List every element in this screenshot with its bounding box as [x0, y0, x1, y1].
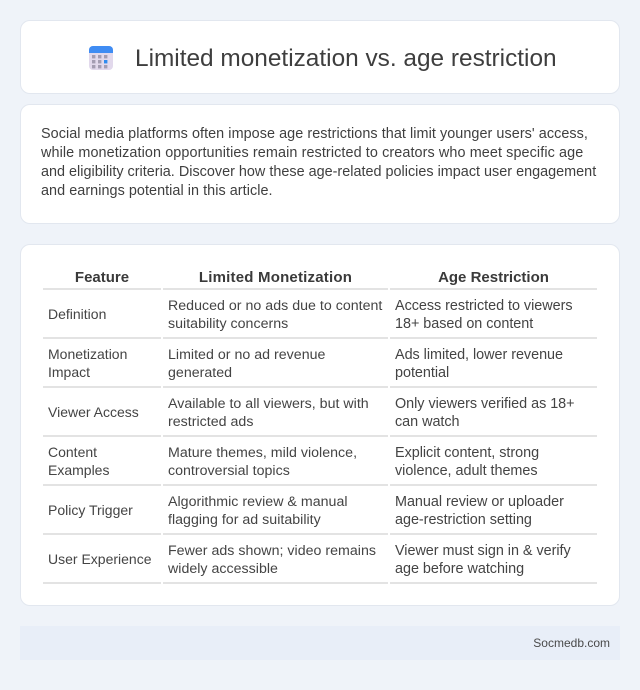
row: User Experience: Viewer must sign in & verify — [395, 543, 571, 559]
row: Definition: 18+ based on content — [395, 316, 533, 332]
row: Content Examples: Content — [48, 444, 97, 460]
row: Policy Trigger: age-restriction setting — [395, 512, 532, 528]
row: Monetization Impact: Ads limited, lower revenue — [395, 347, 563, 363]
table header: Feature — [75, 269, 129, 286]
intro text: Social media platforms often impose age restrictions that limit younger users' access, — [41, 126, 588, 142]
intro text: and earnings potential in this article. — [41, 183, 273, 199]
row: Viewer Access: Only viewers verified as 18+ — [395, 396, 575, 412]
row: Policy Trigger: Algorithmic review & manual — [168, 494, 348, 510]
row: User Experience: age before watching — [395, 561, 524, 577]
row: Definition: suitability concerns — [168, 316, 288, 332]
row: Content Examples: violence, adult themes — [395, 463, 538, 479]
row: Viewer Access: restricted ads — [168, 414, 253, 430]
row: Viewer Access: Available to all viewers, but with — [168, 396, 369, 412]
row: Viewer Access: Viewer Access — [48, 404, 139, 420]
table header: Limited Monetization — [199, 269, 352, 286]
row: Definition — [48, 298, 572, 332]
row: Viewer Access: can watch — [395, 414, 460, 430]
row: Definition: Access restricted to viewers — [395, 298, 572, 314]
row: Content Examples: controversial topics — [168, 463, 290, 479]
row: Monetization Impact: Impact — [48, 364, 90, 380]
row: Content Examples: Examples — [48, 462, 109, 478]
row: Policy Trigger: Manual review or uploader — [395, 494, 564, 510]
table header — [75, 269, 549, 286]
intro text: while monetization opportunities remain restricted to creators who meet specific age — [41, 145, 583, 161]
row: User Experience: widely accessible — [168, 561, 278, 577]
row: User Experience: User Experience — [48, 551, 152, 567]
row: Monetization Impact: generated — [168, 365, 232, 381]
row: Monetization Impact: Monetization — [48, 346, 127, 362]
row: Monetization Impact: Limited or no ad revenue — [168, 347, 325, 363]
title: Limited monetization vs. age restriction — [135, 45, 557, 72]
row: Content Examples: Mature themes, mild violence, — [168, 445, 357, 461]
icon: calendar — [89, 46, 113, 70]
row: Policy Trigger: Policy Trigger — [48, 502, 133, 518]
panel: comparison table card — [20, 244, 620, 606]
row: Policy Trigger: flagging for ad suitability — [168, 512, 321, 528]
panel: title card — [20, 20, 620, 94]
row: Content Examples: Explicit content, strong — [395, 445, 539, 461]
row: Monetization Impact — [48, 346, 563, 381]
footer text: Socmedb.com — [533, 636, 610, 650]
footer bar — [20, 626, 620, 660]
intro text: and eligibility criteria. Discover how these age-related policies impact user engagement — [41, 164, 596, 180]
row: Viewer Access — [48, 396, 575, 430]
row: Definition: Reduced or no ads due to content — [168, 298, 382, 314]
row: Monetization Impact: potential — [395, 365, 449, 381]
intro text — [41, 126, 596, 199]
row: User Experience: Fewer ads shown; video remains — [168, 543, 376, 559]
row: Definition: Definition — [48, 306, 106, 322]
panel: intro text card — [20, 104, 620, 224]
table header: Age Restriction — [438, 269, 549, 286]
row: Content Examples — [48, 444, 539, 479]
row: Policy Trigger — [48, 494, 564, 528]
